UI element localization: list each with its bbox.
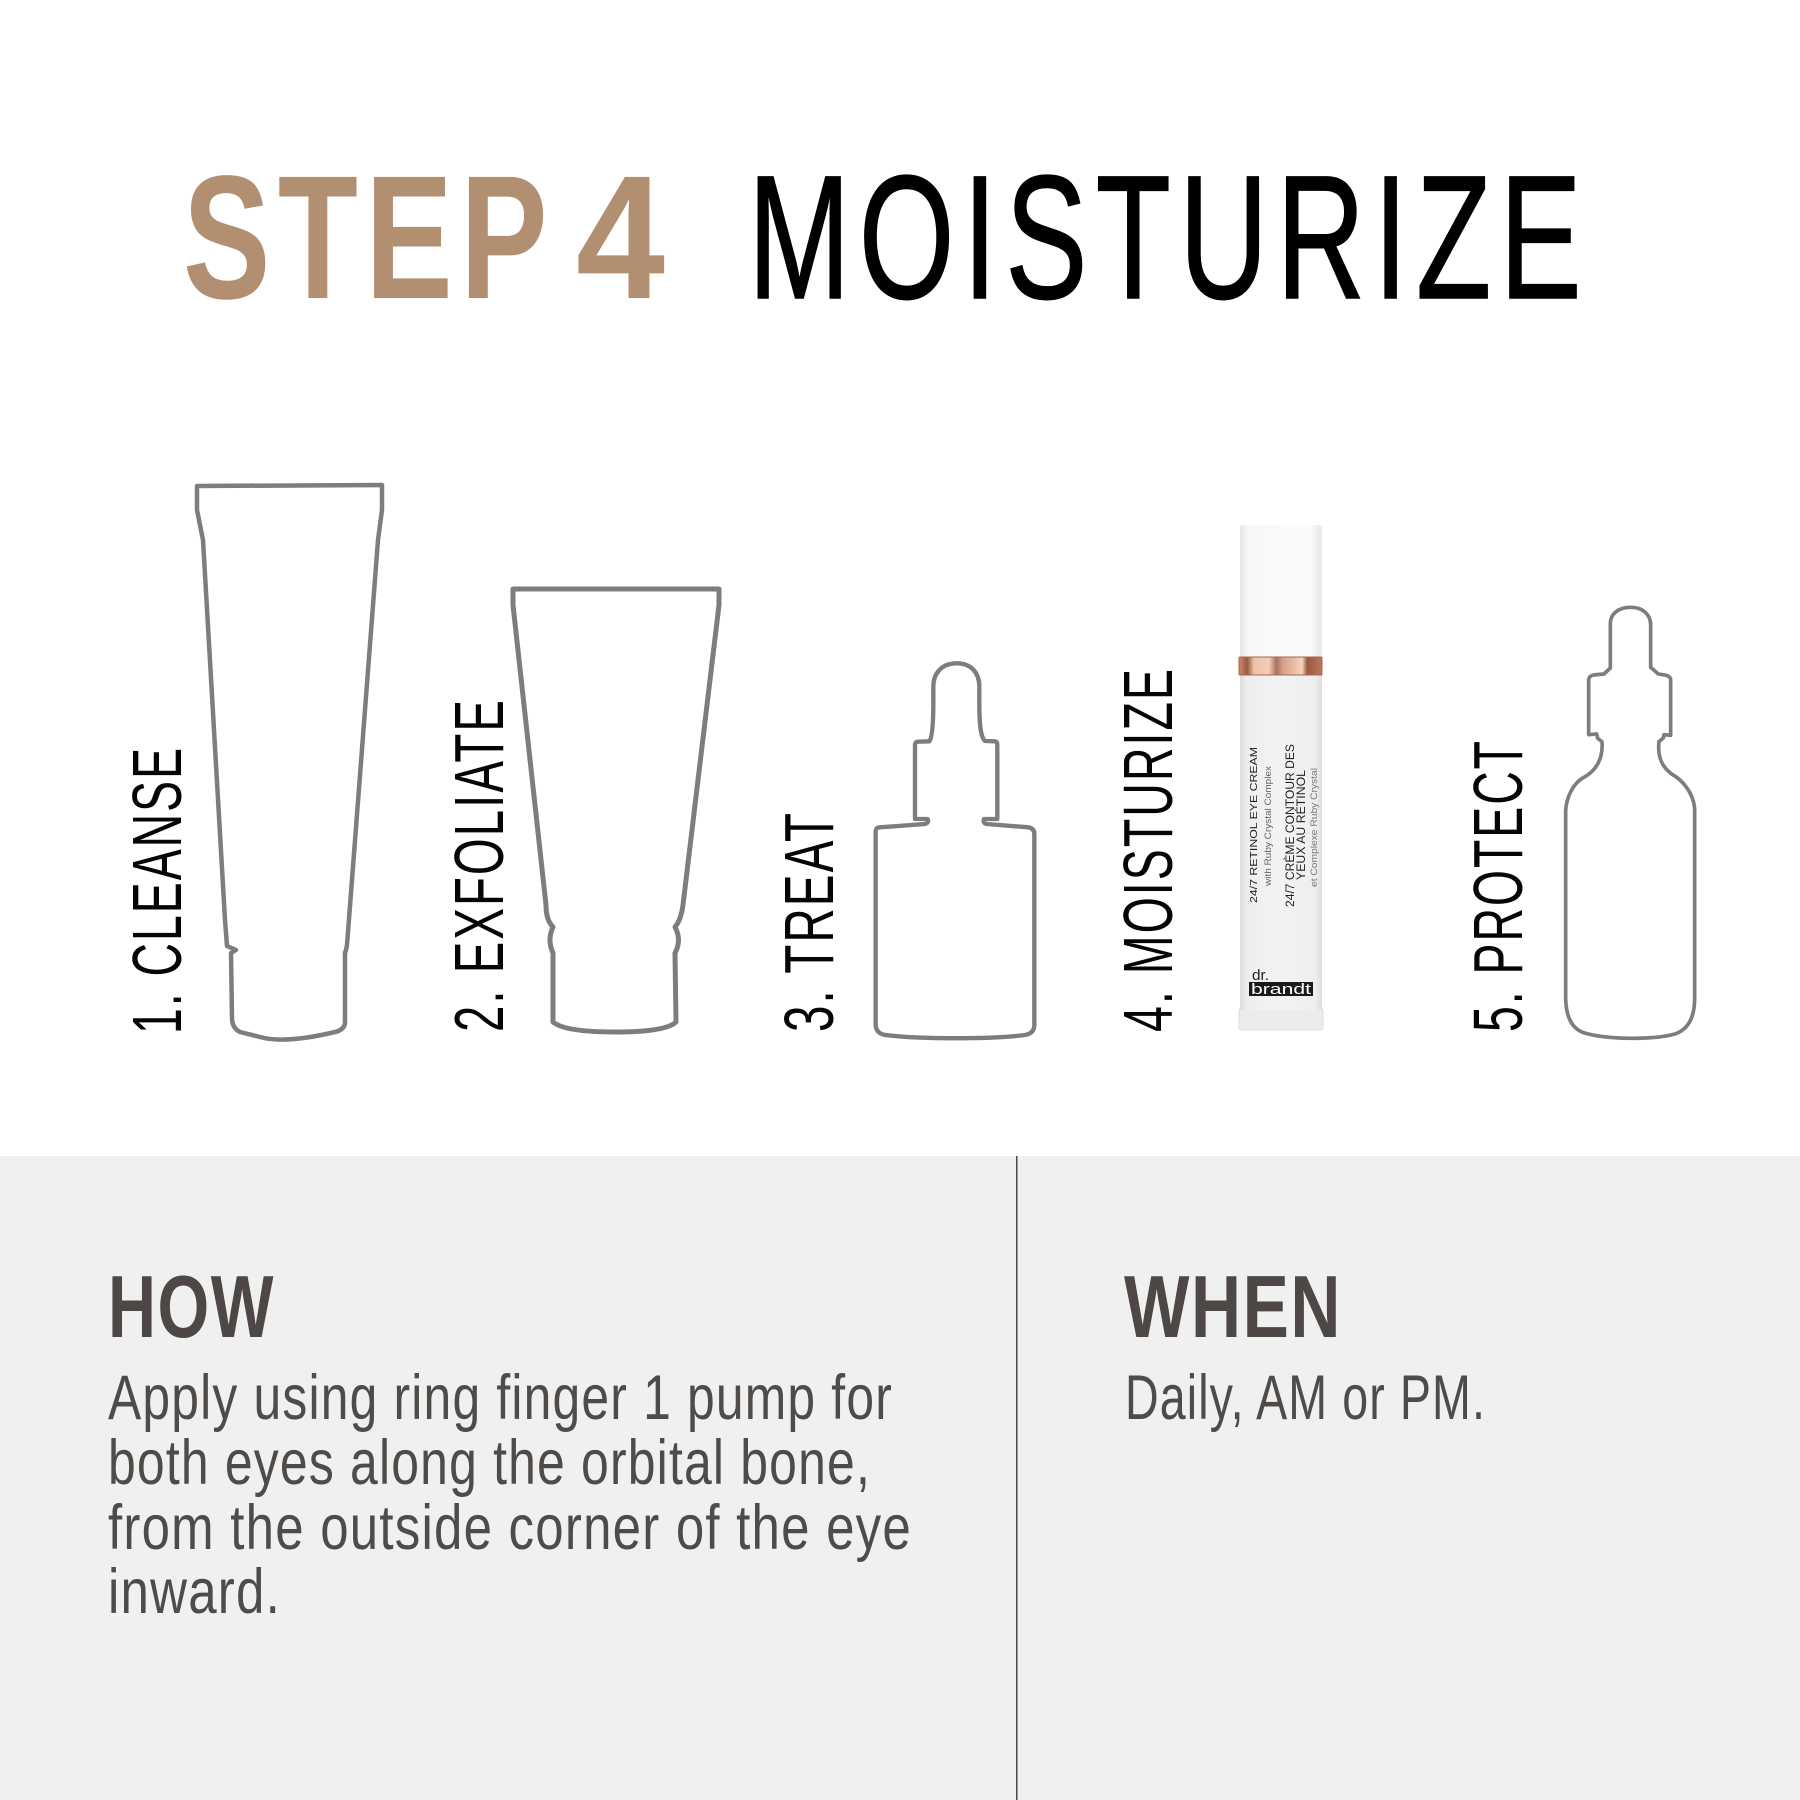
how instructions text: both eyes along the orbital bone,	[108, 1428, 871, 1498]
packaging text: with Ruby Crystal Complex	[1263, 765, 1273, 887]
product: eye cream pump bottle	[1239, 525, 1323, 1030]
icon: treat dropper bottle outline	[876, 663, 1034, 1038]
title: 4	[576, 140, 665, 336]
packaging text: et Complexe Ruby Crystal	[1309, 768, 1319, 887]
dr. brandt logo	[1249, 967, 1313, 998]
how instructions text: inward.	[108, 1557, 281, 1627]
icon: exfoliate tube outline	[513, 589, 719, 1032]
packaging text	[1249, 744, 1319, 907]
icon: cleanse tube outline	[197, 485, 382, 1040]
bottle cap	[1240, 525, 1322, 658]
how instructions text	[108, 1363, 912, 1627]
title: STEP	[183, 140, 555, 336]
when text: Daily, AM or PM.	[1125, 1363, 1486, 1433]
how instructions text: from the outside corner of the eye	[108, 1493, 912, 1563]
when heading: WHEN	[1124, 1257, 1342, 1356]
panel divider	[1016, 1156, 1018, 1800]
packaging text: YEUX AU RÉTINOL	[1295, 769, 1308, 880]
dr. brandt logo: brandt	[1251, 981, 1312, 998]
title	[183, 140, 1590, 336]
panel: when	[1124, 1257, 1486, 1433]
panel: how and when background	[0, 1156, 1800, 1800]
step 4: moisturize label: 4. MOISTURIZE	[1109, 667, 1187, 1032]
bottle body	[1240, 672, 1322, 1010]
how heading: HOW	[108, 1257, 275, 1356]
step 1: cleanse label: 1. CLEANSE	[118, 746, 196, 1034]
packaging text: 24/7 CRÈME CONTOUR DES	[1284, 744, 1297, 907]
step 2: exfoliate label: 2. EXFOLIATE	[440, 698, 518, 1032]
icon: protect dropper bottle outline	[1566, 607, 1695, 1038]
packaging text: 24/7 RETINOL EYE CREAM	[1249, 747, 1260, 903]
step 3: treat label: 3. TREAT	[770, 811, 848, 1032]
dr. brandt logo: dr.	[1252, 967, 1269, 984]
how instructions text: Apply using ring finger 1 pump for	[108, 1363, 893, 1433]
step 5: protect label: 5. PROTECT	[1459, 739, 1537, 1032]
rose gold ring	[1239, 657, 1322, 675]
bottle clear base	[1239, 1008, 1323, 1030]
panel: how	[108, 1257, 912, 1627]
